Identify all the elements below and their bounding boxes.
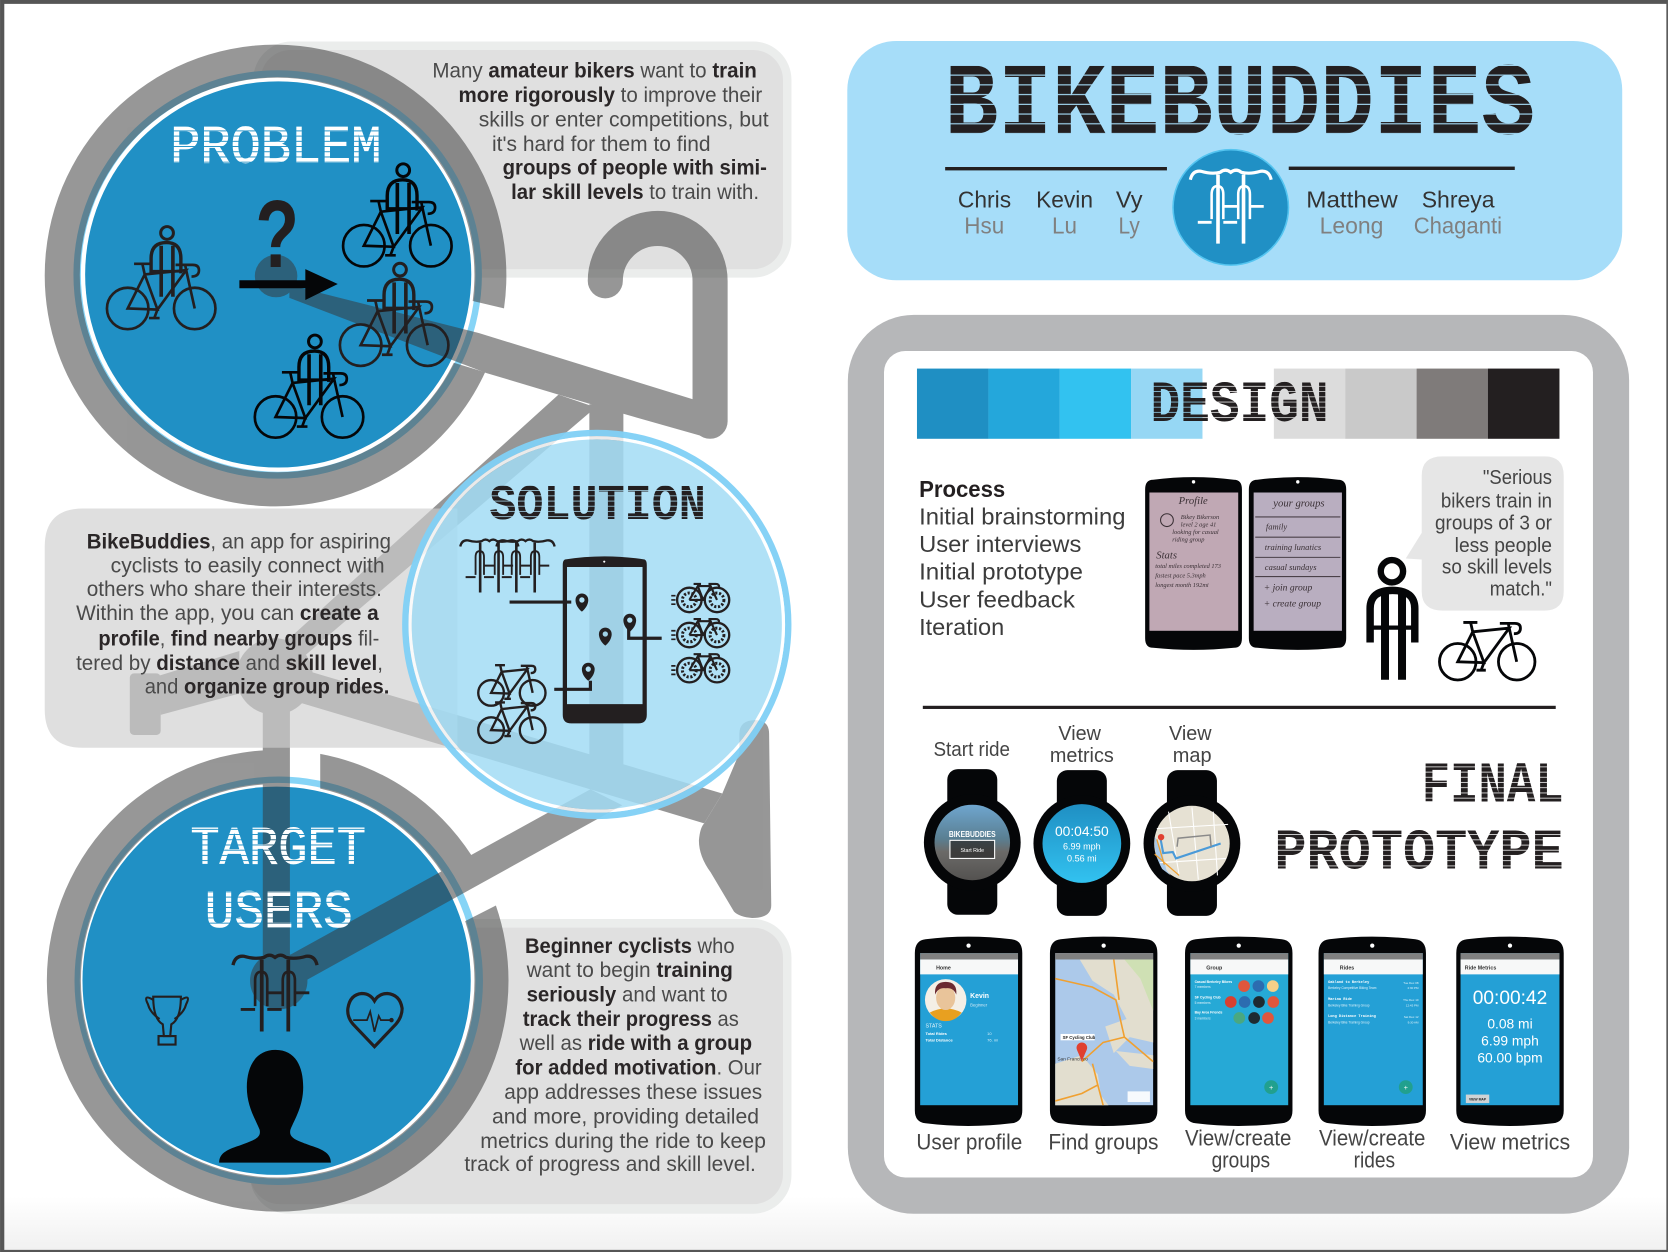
sketch phone: profile: total miles completed 173 (1155, 563, 1221, 570)
phone: view create rides: Berkeley Competitive Biking Team (1328, 986, 1377, 990)
icon: bike (1439, 622, 1535, 680)
phone captions: groups (1212, 1147, 1270, 1172)
text block: problem description (432, 59, 769, 204)
heading: design: DESIGN (1150, 372, 1329, 439)
sketch phone: profile: longest month 192mi (1155, 582, 1209, 589)
phone: view create groups: Group (1206, 966, 1223, 972)
divider (923, 706, 1556, 709)
speech bubble: quote: "Serious (1483, 467, 1552, 489)
phone: view metrics: VIEW MAP (1469, 1097, 1487, 1101)
panel: target users text background (250, 919, 791, 1214)
phone: view create rides: Long Distance Training (1328, 1014, 1376, 1019)
icon: trophy (146, 997, 188, 1045)
sketch phone: profile: fastest pace 5.3mph (1155, 573, 1206, 580)
text block: problem description: groups of people with simi- (503, 155, 767, 179)
logo (1172, 149, 1289, 266)
phone: view create rides: Sat Dec 12 (1404, 1015, 1419, 1019)
icon: question mark: ? (255, 181, 299, 288)
phone: user profile (915, 937, 1022, 1126)
text block: solution description (76, 529, 391, 699)
watch: metrics: 00:04:50 (1055, 823, 1109, 839)
watch: start ride: BIKEBUDDIES (949, 830, 996, 839)
target users wheel disc (75, 777, 483, 1185)
phone: view create rides: + (1404, 1083, 1408, 1092)
watch: metrics: 0.56 mi (1067, 854, 1097, 864)
team names: Vy (1116, 186, 1143, 212)
text block: solution description: and organize group rides. (145, 675, 389, 699)
phone: view create groups: Bay Area Friends (1195, 1011, 1222, 1015)
phone: view create rides: Berkeley Bike Training Group (1328, 1020, 1370, 1024)
text block: target users description: for added motivation. Our (515, 1055, 762, 1079)
sketch phone: profile (1145, 477, 1242, 650)
phone: view create rides: Oakland to Berkeley (1328, 980, 1370, 985)
phone: view metrics: 60.00 bpm (1477, 1050, 1543, 1066)
speech bubble: quote (1406, 456, 1564, 611)
watch labels: View (1169, 723, 1212, 745)
sketch phone: groups: casual sundays (1265, 562, 1317, 572)
phone: view metrics (1456, 937, 1564, 1126)
sketch phone: groups (1249, 477, 1346, 650)
sketch phone: groups: your groups (1272, 498, 1325, 509)
icon: user silhouette (219, 1050, 331, 1163)
phone: view create groups: 3 members (1195, 1017, 1211, 1021)
text block: process: User interviews (919, 531, 1081, 557)
heading: target users: TARGET (190, 820, 366, 881)
icon: cyclist top right (343, 164, 452, 266)
sketch phone: groups: + create group (1264, 598, 1321, 609)
icon: fast bikes (671, 584, 729, 682)
speech bubble: quote: so skill levels (1442, 556, 1552, 578)
text block: process: User feedback (919, 586, 1075, 612)
icon: lone cyclist (107, 227, 215, 329)
text block: problem description: it's hard for them to find (492, 132, 711, 156)
heading: solution: SOLUTION (489, 478, 706, 535)
team names: Shreya (1422, 186, 1496, 212)
text block: problem description: lar skill levels to train with. (511, 180, 759, 204)
watch: metrics (1033, 770, 1130, 916)
phone: view create rides: Thu Dec 10 (1403, 998, 1419, 1002)
text block: process: Initial prototype (919, 559, 1083, 585)
phone: view metrics: Ride Metrics (1465, 966, 1496, 972)
sketch phone: profile: looking for casual (1172, 529, 1219, 536)
text block: target users description: want to begin training (526, 958, 733, 982)
phone captions: Find groups (1048, 1129, 1159, 1154)
team names: Chaganti (1414, 212, 1502, 238)
icon: cyclist middle right (340, 263, 448, 366)
phone: find groups map: San Francisco (1057, 1057, 1088, 1063)
phone: view metrics: 0.08 mi (1487, 1016, 1533, 1032)
phone: view create groups: + (1269, 1083, 1273, 1092)
text block: target users description: track of progress and skill level. (464, 1152, 756, 1176)
sketch phone: groups: family (1266, 522, 1287, 532)
text block: process: Initial brainstorming (919, 503, 1125, 529)
watch: map (1144, 770, 1240, 916)
speech bubble: quote: bikers train in (1441, 490, 1552, 512)
phone: user profile: 10 (987, 1031, 992, 1036)
text block: solution description: tered by distance and skill level, (76, 651, 383, 675)
team names: Chris (958, 186, 1011, 212)
icon: cyclist bottom (255, 335, 363, 438)
icon: group of front-view bikes (460, 540, 555, 592)
text block: process: Iteration (919, 614, 1004, 640)
watch: start ride (924, 769, 1021, 915)
phone: user profile: Total Rides (925, 1031, 948, 1036)
phone: view create rides: 9:30 AM (1408, 1020, 1419, 1024)
phone captions (916, 1126, 1570, 1172)
bike frame (45, 45, 771, 1212)
heading: problem: PROBLEM (170, 119, 381, 180)
problem wheel disc (73, 70, 482, 479)
watch labels: map (1173, 745, 1212, 767)
panel: solution text background (45, 508, 457, 748)
text block: solution description: BikeBuddies, an app for aspiring (87, 529, 391, 553)
phone: view create rides: 12:45 PM (1406, 1003, 1419, 1007)
phone: view metrics: 00:00:42 (1473, 988, 1547, 1009)
team names: Hsu (964, 212, 1004, 238)
phone captions: User profile (916, 1129, 1022, 1154)
phone: user profile: Kevin (970, 993, 989, 1000)
team names: Leong (1320, 212, 1383, 238)
panel: title (847, 41, 1622, 280)
icon: stacked side-view bikes (478, 665, 546, 743)
icon: arrow (239, 269, 338, 300)
phone: user profile: Beginner (970, 1002, 988, 1007)
sketch phone: profile: riding group (1172, 536, 1204, 543)
phone captions: View/create (1319, 1126, 1425, 1151)
text block: process: Process (919, 476, 1005, 502)
sketch phone: groups: training lunatics (1265, 542, 1322, 552)
phone: user profile: STATS (925, 1024, 942, 1030)
phone: view create groups: SF Cycling Club (1195, 995, 1221, 999)
watch labels: Start ride (933, 739, 1010, 761)
phone: find groups map (1050, 937, 1157, 1126)
heading: target users (190, 820, 366, 944)
team names: Lu (1052, 212, 1077, 238)
palette swatches (917, 369, 1559, 439)
panel: design (848, 315, 1629, 1214)
sketch phone: profile: Stats (1156, 550, 1177, 561)
phone: view create rides: Rides (1340, 966, 1354, 972)
icon: phone with map pins (510, 556, 662, 723)
phone: view create rides: Berkeley Bike Training Group (1328, 1003, 1370, 1007)
text block: solution description: profile, find nearby groups fil- (98, 627, 379, 651)
phone: view create groups (1185, 937, 1292, 1126)
text block: target users description: Beginner cyclists who (525, 934, 735, 958)
sketch phone: profile: Bikey Bikerson (1181, 514, 1219, 521)
phone: find groups map: SF Cycling Club (1063, 1035, 1096, 1040)
text block: target users description: and more, providing detailed (492, 1104, 759, 1128)
phone: view create rides (1319, 937, 1426, 1126)
team names: Ly (1119, 212, 1140, 238)
team names: Matthew (1306, 186, 1398, 212)
sketch phone: groups: + join group (1264, 582, 1313, 593)
speech bubble: quote: match." (1490, 579, 1552, 601)
heading: final prototype: PROTOTYPE (1274, 822, 1564, 887)
phone: view create groups: 5 members (1195, 1001, 1211, 1005)
phone: user profile: 76. mi (987, 1037, 998, 1042)
text block: problem description: more rigorously to improve their (459, 83, 762, 107)
text block: solution description: others who share their interests. (87, 577, 382, 601)
watch: start ride: Start Ride (961, 848, 984, 854)
speech bubble: quote: less people (1455, 535, 1552, 557)
phone: view create rides: Tue Dec 08 (1403, 981, 1419, 985)
icon: front-view bikes (233, 955, 317, 1032)
sketch phone: profile: Profile (1178, 496, 1208, 507)
speech bubble: quote: groups of 3 or (1435, 513, 1552, 535)
text block: target users description: track their progress as (523, 1007, 739, 1031)
phone captions: rides (1354, 1147, 1395, 1172)
watch labels: metrics (1050, 745, 1114, 767)
team names: Kevin (1036, 186, 1093, 212)
text block: solution description: cyclists to easily connect with (111, 553, 385, 577)
watch labels (933, 723, 1212, 767)
text block: target users description: app addresses these issues (504, 1080, 762, 1104)
phone: view create groups: Casual Berkeley Bikers (1195, 980, 1232, 984)
text block: target users description: metrics during the ride to keep (480, 1129, 766, 1153)
text block: target users description: seriously and want to (527, 982, 728, 1006)
panel: problem text background (253, 41, 791, 278)
title: BIKEBUDDIES (945, 48, 1535, 165)
icon: person (1370, 560, 1415, 680)
heading: final prototype (1274, 755, 1564, 887)
phone: view create rides: 2:30 PM (1407, 986, 1419, 990)
sketch phone: profile: level 2 age 41 (1181, 522, 1216, 529)
phone: view create groups: 7 members (1195, 985, 1211, 989)
solution wheel disc (405, 433, 788, 816)
text block: target users description (464, 934, 766, 1176)
phone: user profile: Home (936, 966, 951, 972)
text block: problem description: Many amateur bikers want to train (432, 59, 757, 83)
team names (958, 186, 1502, 238)
text block: solution description: Within the app, you can create a (76, 601, 379, 625)
watch: metrics: 6.99 mph (1063, 841, 1101, 851)
icon: heart with pulse (348, 994, 402, 1047)
phone: user profile: Total Distance (925, 1037, 953, 1042)
text block: process (919, 476, 1125, 640)
heading: final prototype: FINAL (1422, 755, 1564, 820)
phone: view metrics: 6.99 mph (1481, 1033, 1539, 1049)
phone: view create rides: Marina Ride (1328, 997, 1352, 1002)
phone captions: View/create (1185, 1126, 1291, 1151)
text block: problem description: skills or enter competitions, but (479, 108, 769, 132)
text block: target users description: well as ride with a group (519, 1031, 752, 1055)
heading: target users: USERS (205, 883, 353, 944)
phone captions: View metrics (1450, 1129, 1570, 1154)
watch labels: View (1058, 723, 1101, 745)
title rules (945, 167, 1515, 170)
